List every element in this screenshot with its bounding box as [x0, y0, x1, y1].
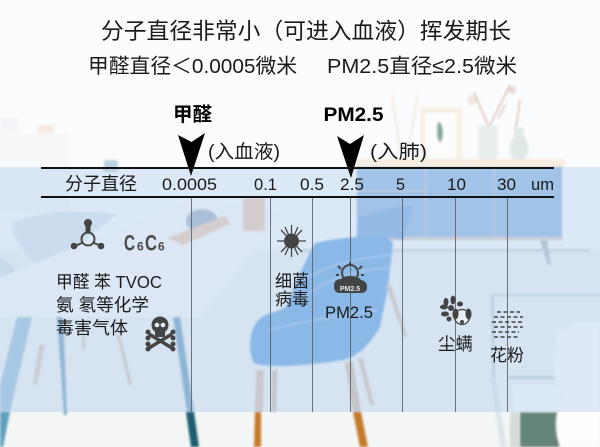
left armchair: [12, 211, 117, 266]
coffee table: [491, 294, 600, 378]
marker label: formaldehyde: 甲醛: [173, 104, 212, 126]
text: PM2.5: PM2.5: [325, 303, 373, 322]
vertical guide lines: [192, 198, 508, 412]
scale labels: 5: [396, 175, 405, 194]
text: gases: 氨 氡等化学: [56, 295, 149, 315]
back blue chair: [357, 205, 413, 240]
text: dust mite: 尘螨: [438, 334, 473, 354]
icon: skull and crossbones: [146, 316, 176, 352]
marker label: PM2.5: PM2.5: [324, 105, 384, 126]
icon label: C6C6: C: [145, 230, 157, 256]
icon: dust mite dog: [440, 296, 472, 324]
arrow: PM2.5 marker: [337, 135, 364, 178]
scale labels: 分子直径: [65, 174, 137, 194]
arrow: formaldehyde marker: [178, 133, 205, 176]
text: gases: 甲醛 苯 TVOC: [56, 272, 162, 292]
icon label: C6C6: [124, 230, 165, 256]
text: bacteria and viruses: [275, 272, 309, 309]
icon: molecule: [71, 219, 104, 249]
subtitle: [88, 55, 517, 78]
icon label: C6C6: 6: [158, 240, 165, 254]
scale labels: 0.1: [254, 175, 277, 194]
scale axis lines: [41, 167, 554, 198]
text: bacteria and viruses: 细菌: [275, 272, 309, 291]
title: 分子直径非常小（可进入血液）挥发期长: [101, 19, 511, 44]
scale labels: [65, 174, 554, 194]
scale labels: 0.5: [300, 175, 324, 194]
subtitle: PM2.5直径≤2.5微米: [327, 55, 517, 78]
icon label: C6C6: C: [124, 230, 135, 256]
scale labels: 2.5: [340, 175, 364, 194]
icon: pollen: [492, 312, 523, 337]
scale labels: 10: [447, 175, 466, 194]
text: pollen: 花粉: [490, 346, 524, 365]
note: into lungs: (入肺): [370, 141, 427, 163]
subtitle: 甲醛直径＜0.0005微米: [88, 55, 297, 78]
chair ribs: [268, 255, 392, 330]
table legs: [0, 317, 32, 412]
scale labels: 30: [497, 175, 516, 194]
text: bacteria and viruses: 病毒: [275, 290, 309, 309]
icon: PM2.5 cloud: [334, 262, 367, 293]
scale labels: 0.0005: [162, 175, 217, 194]
text: gases: [56, 272, 162, 338]
note: into blood: (入血液): [208, 141, 280, 163]
table top: [0, 197, 285, 317]
left wall decor: [0, 133, 70, 213]
sideboard: [357, 167, 562, 237]
icon: bacteria: [277, 225, 306, 257]
blue overlay panel: [0, 167, 600, 412]
chair legs: [345, 362, 361, 412]
scale labels: um: [531, 175, 554, 194]
front blue chair: [250, 237, 393, 366]
text: gases: 毒害气体: [56, 318, 129, 338]
tea set: [186, 209, 218, 233]
icon label: C6C6: 6: [137, 240, 144, 254]
decor on sideboard: [420, 107, 462, 159]
icon: PM2.5 cloud: PM2.5: [340, 286, 360, 293]
